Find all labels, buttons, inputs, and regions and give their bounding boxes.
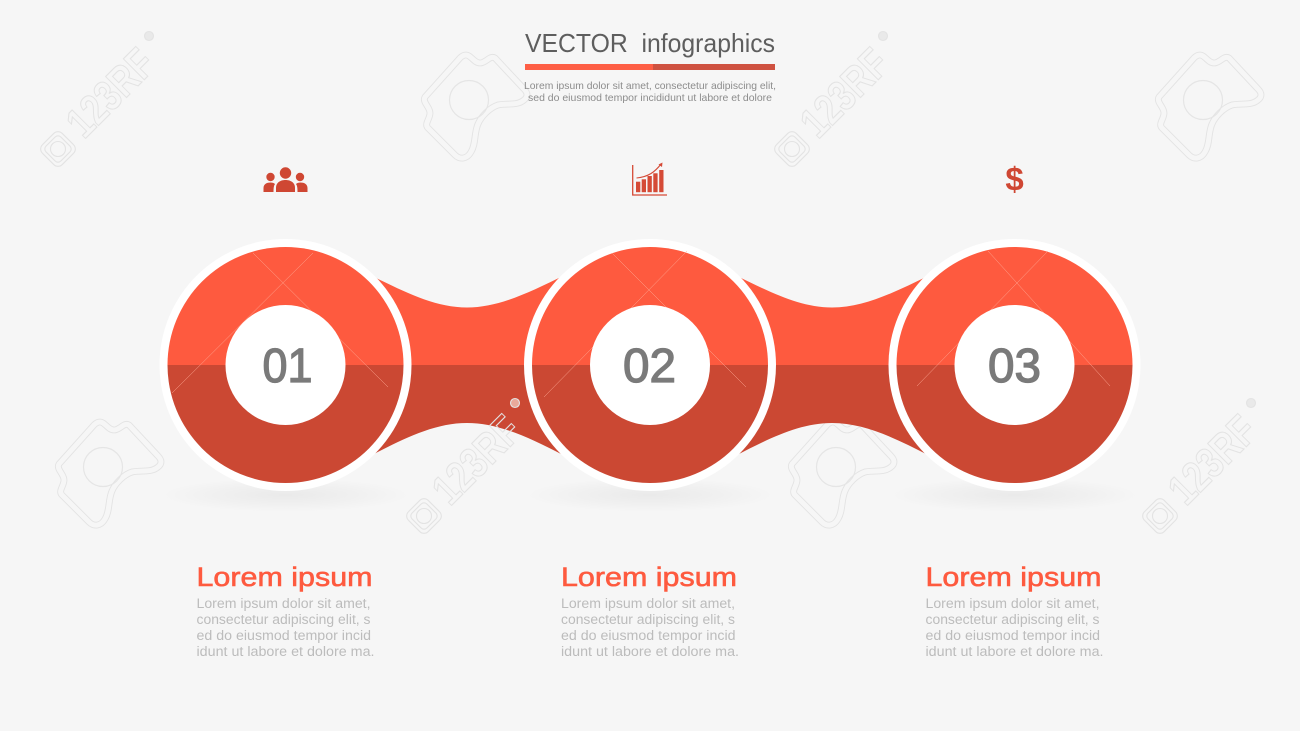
text block 01 xyxy=(196,562,374,659)
text block 02: Lorem ipsum xyxy=(561,562,737,592)
icon: people xyxy=(264,167,308,192)
text block 02 xyxy=(561,562,739,659)
text block 02: consectetur adipiscing elit, s xyxy=(561,612,735,627)
text block 03: Lorem ipsum xyxy=(926,562,1102,592)
connector: 02 to 03 xyxy=(737,276,928,455)
text block 02: idunt ut labore et dolore ma. xyxy=(561,644,739,659)
circle 01: 01 xyxy=(262,340,312,393)
text block 03: idunt ut labore et dolore ma. xyxy=(926,644,1104,659)
title underline bar xyxy=(525,64,775,70)
text block 01: Lorem ipsum xyxy=(196,562,372,592)
icon: rising bar chart xyxy=(633,162,667,195)
text block 03: consectetur adipiscing elit, s xyxy=(926,612,1100,627)
text block 01: Lorem ipsum dolor sit amet, xyxy=(196,596,370,611)
circle 03: 03 xyxy=(988,340,1041,393)
text block 03: ed do eiusmod tempor incid xyxy=(926,628,1100,643)
subtitle: sed do eiusmod tempor incididunt ut labore et dolore xyxy=(528,92,772,104)
watermark: 123RF logos: 123RF xyxy=(791,40,899,147)
text block 03: Lorem ipsum dolor sit amet, xyxy=(926,596,1100,611)
text block 01: consectetur adipiscing elit, s xyxy=(196,612,371,627)
circle 02: 02 xyxy=(623,340,676,393)
circle 01 xyxy=(160,239,412,491)
watermark: 123RF logos: 123RF xyxy=(57,40,165,147)
text block 01: idunt ut labore et dolore ma. xyxy=(196,644,374,659)
icon: dollar sign: $ xyxy=(1005,160,1024,198)
text block 02: Lorem ipsum dolor sit amet, xyxy=(561,596,735,611)
text block 02: ed do eiusmod tempor incid xyxy=(561,628,736,643)
circle 02 xyxy=(524,239,776,491)
watermark: 123RF logos xyxy=(38,32,1267,536)
connector: 01 to 02 xyxy=(372,276,563,455)
text block 01: ed do eiusmod tempor incid xyxy=(196,628,371,643)
text block 03 xyxy=(926,562,1104,659)
shadows under circles xyxy=(160,478,1140,512)
subtitle xyxy=(524,80,776,104)
title: VECTOR infographics xyxy=(525,28,775,58)
watermark: egg stamps xyxy=(58,55,1261,525)
subtitle: Lorem ipsum dolor sit amet, consectetur adipiscing elit, xyxy=(524,80,776,92)
watermark: 123RF logos: 123RF xyxy=(1159,407,1267,514)
circle 03 xyxy=(888,239,1140,491)
watermark: 123RF logos: 123RF xyxy=(423,407,531,514)
